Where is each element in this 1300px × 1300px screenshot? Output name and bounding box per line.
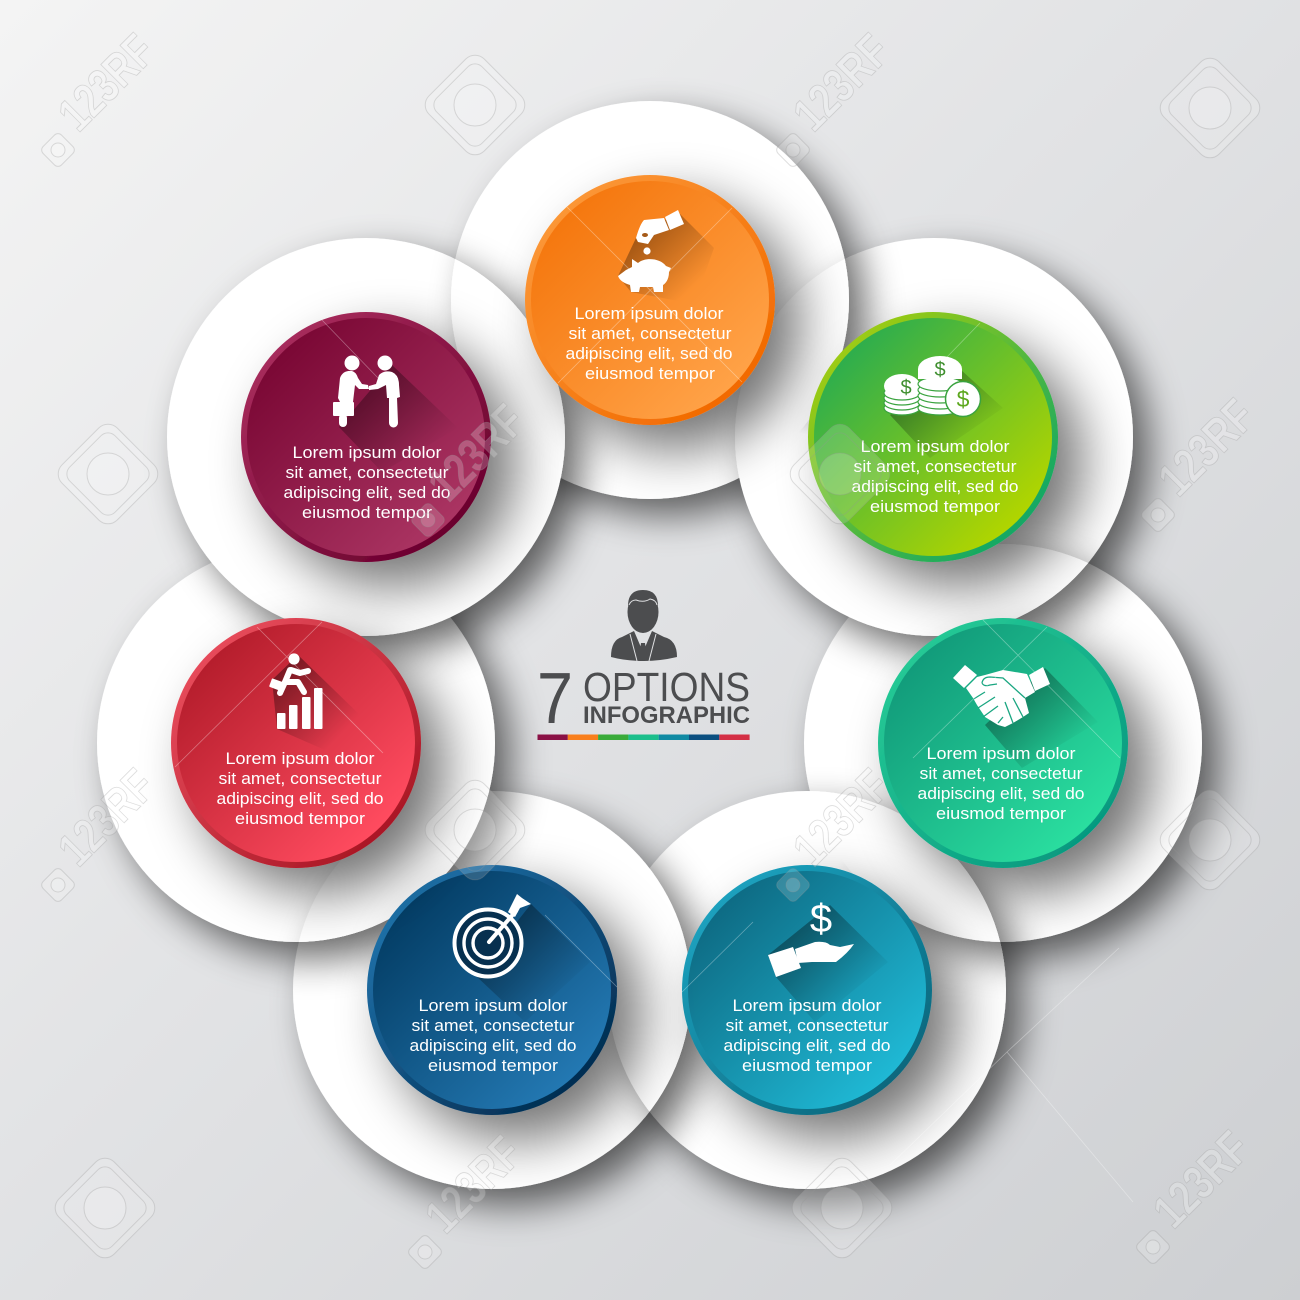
- text: cyan option: adipiscing elit, sed do: [724, 1036, 890, 1055]
- title: options: OPTIONS: [583, 664, 750, 710]
- watermark: 123RF stamps and logos: 123RF: [784, 760, 900, 876]
- icon: hand holding dollar: $: [810, 897, 832, 941]
- text: cyan option: [724, 996, 890, 1075]
- icon: two people shaking hands: [333, 356, 400, 428]
- panel: orange option: [525, 175, 775, 425]
- icon: target with arrow: [454, 894, 531, 976]
- icon: businessman running up bar chart: [269, 653, 322, 729]
- text: teal option: adipiscing elit, sed do: [918, 784, 1084, 803]
- panel: cyan option: [682, 865, 932, 1115]
- watermark: 123RF stamps and logos: 123RF: [419, 395, 535, 511]
- text: red option: Lorem ipsum dolor: [226, 749, 375, 768]
- icon: hand holding dollar: [768, 897, 854, 977]
- text: red option: adipiscing elit, sed do: [216, 789, 384, 808]
- panel: green option: [808, 312, 1058, 562]
- text: red option: [216, 749, 384, 828]
- icon: stacks of coins: $: [957, 386, 970, 412]
- panel: blue option: [367, 865, 617, 1115]
- text: maroon option: adipiscing elit, sed do: [284, 483, 450, 502]
- text: green option: sit amet, consectetur: [854, 457, 1017, 476]
- panel: maroon option: [241, 312, 491, 562]
- text: green option: Lorem ipsum dolor: [860, 437, 1010, 456]
- text: maroon option: eiusmod tempor: [302, 503, 432, 522]
- icon: businessman: [611, 590, 677, 661]
- text: orange option: [566, 304, 732, 383]
- text: cyan option: eiusmod tempor: [742, 1056, 872, 1075]
- panel: teal option: [878, 618, 1128, 868]
- icon: handshake: [953, 665, 1050, 727]
- text: teal option: eiusmod tempor: [936, 804, 1066, 823]
- icon: stacks of coins: $: [900, 377, 912, 399]
- text: blue option: Lorem ipsum dolor: [418, 996, 568, 1015]
- text: green option: adipiscing elit, sed do: [852, 477, 1018, 496]
- text: orange option: Lorem ipsum dolor: [574, 304, 724, 323]
- icon: stacks of coins: $: [934, 359, 946, 381]
- watermark: 123RF stamps and logos: 123RF: [49, 25, 165, 141]
- text: orange option: adipiscing elit, sed do: [566, 344, 732, 363]
- icon: stacks of coins: [884, 356, 980, 416]
- text: blue option: [410, 996, 576, 1075]
- text: teal option: [918, 744, 1084, 823]
- text: blue option: sit amet, consectetur: [412, 1016, 575, 1035]
- text: teal option: Lorem ipsum dolor: [926, 744, 1076, 763]
- title number: 7: [537, 659, 573, 739]
- central title block: [537, 590, 750, 740]
- text: blue option: eiusmod tempor: [428, 1056, 558, 1075]
- watermark: 123RF stamps and logos: 123RF: [416, 1127, 532, 1243]
- rainbow colour bar: [538, 734, 750, 740]
- panel: red option: [171, 618, 421, 868]
- text: maroon option: Lorem ipsum dolor: [292, 443, 442, 462]
- text: maroon option: [284, 443, 450, 522]
- watermark: 123RF stamps and logos: 123RF: [1149, 390, 1265, 506]
- text: cyan option: Lorem ipsum dolor: [732, 996, 882, 1015]
- icon: hand dropping coin into piggy bank: [618, 210, 684, 292]
- text: orange option: sit amet, consectetur: [568, 324, 732, 343]
- watermark: 123RF stamps and logos: 123RF: [784, 25, 900, 141]
- text: orange option: eiusmod tempor: [585, 364, 715, 383]
- text: teal option: sit amet, consectetur: [920, 764, 1083, 783]
- text: red option: sit amet, consectetur: [218, 769, 382, 788]
- text: maroon option: sit amet, consectetur: [286, 463, 449, 482]
- text: cyan option: sit amet, consectetur: [726, 1016, 889, 1035]
- watermark: 123RF stamps and logos: 123RF: [1144, 1122, 1260, 1238]
- text: red option: eiusmod tempor: [235, 809, 365, 828]
- text: green option: [852, 437, 1018, 516]
- text: blue option: adipiscing elit, sed do: [410, 1036, 576, 1055]
- text: green option: eiusmod tempor: [870, 497, 1000, 516]
- watermark: 123RF stamps and logos: 123RF: [49, 760, 165, 876]
- title: infographic: INFOGRAPHIC: [583, 702, 750, 729]
- white overlapping discs: [97, 101, 1202, 1189]
